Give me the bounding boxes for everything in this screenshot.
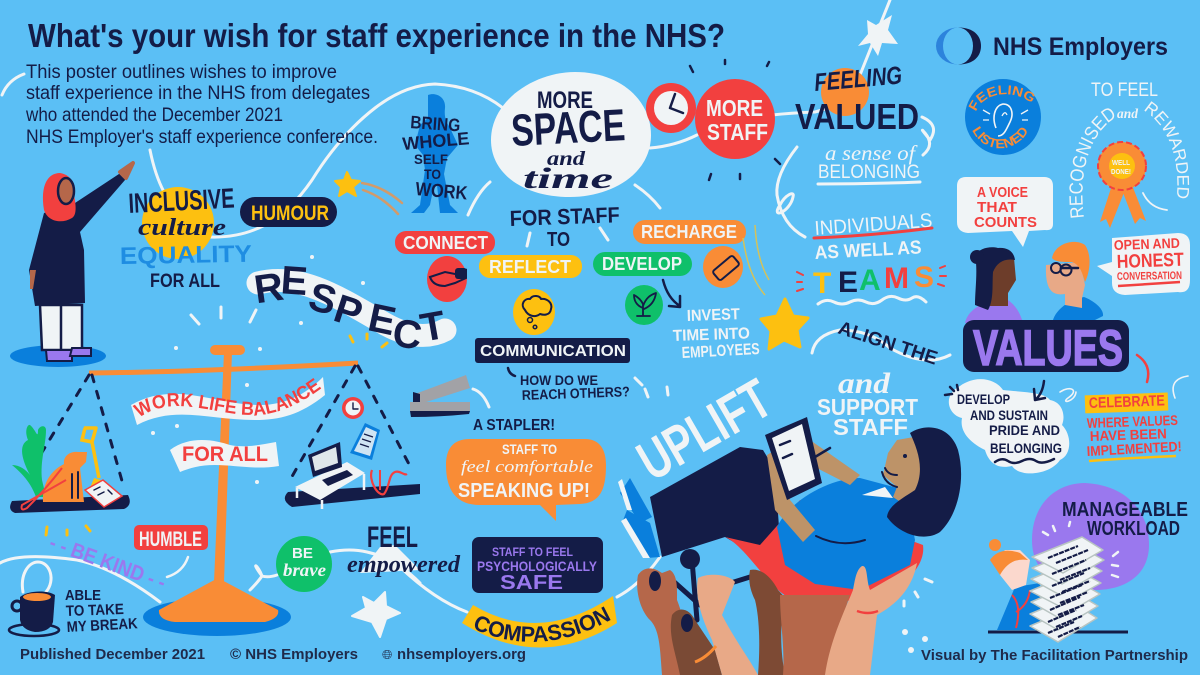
more space and time bubble: time xyxy=(523,162,613,195)
bring whole self to work silhouette: BRING xyxy=(410,112,461,135)
humble tag xyxy=(134,525,208,577)
recognised and rewarded: TO FEEL xyxy=(1091,80,1158,101)
communication box: REACH OTHERS? xyxy=(522,383,630,403)
recognised and rewarded: and xyxy=(1117,107,1139,122)
connecting white swirl lines xyxy=(0,0,950,612)
respect banner: T xyxy=(417,303,449,351)
more space and time bubble: and xyxy=(547,148,586,170)
icon: shooting star xyxy=(335,172,402,214)
invest time into employees: EMPLOYEES xyxy=(681,341,760,362)
individuals as well as teams: INDIVIDUALS xyxy=(814,210,933,240)
a voice that counts speech bubble: COUNTS xyxy=(974,214,1037,231)
respect banner: S xyxy=(304,275,341,324)
decorative sparkles xyxy=(151,255,928,653)
develop and sustain cloud: PRIDE AND xyxy=(989,422,1060,438)
be kind: - - BE KIND - - xyxy=(46,531,169,594)
recognised and rewarded: REWARDED xyxy=(1144,101,1190,198)
feeling listened badge: FEELING xyxy=(968,85,1034,111)
footer credits: © NHS Employers xyxy=(230,646,358,663)
a sense of belonging: a sense of xyxy=(825,141,918,165)
intro text block xyxy=(25,62,378,148)
psychologically safe box: SAFE xyxy=(500,572,563,594)
able to take my break: MY BREAK xyxy=(66,615,138,636)
communication box: COMMUNICATION xyxy=(480,343,626,360)
develop pill and sprout icon: DEVELOP xyxy=(602,254,682,274)
for all banner xyxy=(170,440,279,472)
respect banner: E xyxy=(279,258,309,304)
celebrate label: CELEBRATE xyxy=(1089,392,1165,412)
celebrate label xyxy=(1060,355,1188,461)
compassion banner: COMPASSION xyxy=(474,606,610,642)
bring whole self to work silhouette: SELF xyxy=(414,151,448,167)
more staff circle: STAFF xyxy=(707,119,768,145)
a stapler label: A STAPLER! xyxy=(473,417,555,434)
feeling valued xyxy=(795,61,919,137)
inclusive culture equality for all: INCLUSIVE xyxy=(128,182,235,219)
left scale pan with dog, plant, spade and book xyxy=(10,425,130,513)
arrow from values to cloud xyxy=(1034,381,1045,400)
icon: white star xyxy=(858,15,898,56)
humour pill xyxy=(240,197,337,227)
inclusive culture equality for all: EQUALITY xyxy=(120,241,252,270)
celebrate label: HAVE BEEN xyxy=(1090,425,1167,444)
arrow to invest time xyxy=(663,280,680,307)
speaking up speech bubble xyxy=(446,439,606,521)
more staff circle xyxy=(690,60,780,180)
individuals as well as teams: E xyxy=(838,266,858,299)
psychologically safe box: PSYCHOLOGICALLY xyxy=(477,558,598,574)
respect banner xyxy=(252,258,449,359)
speaking up speech bubble: SPEAKING UP! xyxy=(458,480,590,502)
more space and time bubble xyxy=(491,72,651,197)
a voice that counts speech bubble xyxy=(957,177,1053,247)
open and honest conversation speech bubble xyxy=(1097,233,1190,295)
feel empowered xyxy=(347,521,461,578)
more space and time bubble: SPACE xyxy=(510,99,626,156)
develop and sustain cloud: BELONGING xyxy=(990,440,1062,456)
individuals as well as teams: A xyxy=(859,264,881,297)
intro text block: This poster outlines wishes to improve xyxy=(26,62,337,83)
individuals as well as teams xyxy=(797,210,946,304)
individuals as well as teams: AS WELL AS xyxy=(814,237,922,264)
align the: ALIGN THE xyxy=(835,318,940,370)
recognised and rewarded xyxy=(1069,80,1190,228)
respect banner: E xyxy=(364,296,400,344)
icon: yellow star xyxy=(761,299,808,349)
intro text block: who attended the December 2021 xyxy=(25,105,283,126)
NHS Employers logo xyxy=(936,28,1168,64)
a voice that counts speech bubble: THAT xyxy=(977,199,1017,216)
develop and sustain cloud: AND SUSTAIN xyxy=(970,407,1048,423)
open and honest conversation speech bubble: HONEST xyxy=(1116,250,1184,273)
individuals as well as teams: S xyxy=(914,261,934,294)
icon: red clock xyxy=(646,83,696,133)
develop and sustain cloud: DEVELOP xyxy=(957,391,1010,407)
bring whole self to work silhouette: WHOLE xyxy=(402,128,470,154)
a sense of belonging: BELONGING xyxy=(818,162,920,183)
respect banner: P xyxy=(329,287,368,337)
work life balance banner: WORK LIFE BALANCE xyxy=(132,378,322,416)
and support staff xyxy=(817,367,918,440)
invest time into employees: INVEST xyxy=(687,306,740,325)
a voice that counts speech bubble: A VOICE xyxy=(977,184,1028,201)
be brave circle: BE xyxy=(292,545,313,562)
intro text block: staff experience in the NHS from delegates xyxy=(26,83,370,104)
individuals as well as teams: M xyxy=(884,262,909,295)
footer credits xyxy=(20,646,1188,664)
feel empowered: FEEL xyxy=(367,521,418,554)
celebrate label: IMPLEMENTED! xyxy=(1086,438,1182,459)
more staff circle: MORE xyxy=(706,95,763,121)
connect pill and handshake icon: CONNECT xyxy=(403,233,488,253)
balance scale xyxy=(33,345,412,636)
uplift heading: UPLIFT xyxy=(626,366,782,492)
celebrate label: WHERE VALUES xyxy=(1087,412,1178,431)
for staff to xyxy=(509,202,620,251)
figure: supporting hands and wheelchair xyxy=(637,549,932,675)
footer credits: 🌐︎ xyxy=(382,647,392,662)
feel empowered: empowered xyxy=(347,552,461,578)
figure: woman with dark hair xyxy=(965,247,1023,323)
figure pointing woman in hijab xyxy=(10,163,133,367)
footer credits: Published December 2021 xyxy=(20,646,205,663)
connect pill and handshake icon xyxy=(395,231,495,302)
and support staff: STAFF xyxy=(833,414,908,440)
for staff to: FOR STAFF xyxy=(509,202,620,231)
icon: coffee cup xyxy=(9,562,59,636)
inclusive culture equality for all: FOR ALL xyxy=(150,271,220,292)
feeling listened badge: LISTENED xyxy=(972,126,1027,148)
values box: VALUES xyxy=(973,320,1123,376)
recognised and rewarded: DONE! xyxy=(1111,169,1131,176)
able to take my break: TO TAKE xyxy=(66,601,124,620)
inclusive culture equality for all: culture xyxy=(138,215,226,241)
psychologically safe box xyxy=(472,537,603,594)
intro text block: NHS Employer's staff experience conference. xyxy=(26,127,378,148)
figure: man with glasses xyxy=(1046,242,1103,320)
a sense of belonging xyxy=(818,141,920,184)
feeling valued: VALUED xyxy=(795,96,919,137)
for all banner: FOR ALL xyxy=(182,443,268,466)
manageable workload xyxy=(988,483,1188,642)
feeling listened badge xyxy=(965,79,1041,155)
invest time into employees: TIME INTO xyxy=(673,325,750,345)
invest time into employees xyxy=(673,306,760,362)
develop pill and sprout icon xyxy=(593,252,692,325)
develop and sustain cloud xyxy=(945,379,1069,473)
respect banner: R xyxy=(252,265,286,312)
and support staff: and xyxy=(838,367,891,400)
NHS Employers logo: NHS Employers xyxy=(993,33,1168,61)
respect banner: C xyxy=(390,311,425,359)
icon: stapler xyxy=(410,375,470,417)
recharge pill and battery icon xyxy=(633,220,769,295)
figure: person being lifted with clipboard xyxy=(618,417,961,612)
individuals as well as teams: T xyxy=(813,267,831,300)
yellow ticks above scales xyxy=(46,334,387,535)
right scale pan with clock, clipboard, computer and stethoscope xyxy=(285,397,420,509)
be brave circle xyxy=(276,536,332,592)
bring whole self to work silhouette xyxy=(402,94,470,213)
speaking up speech bubble: STAFF TO xyxy=(502,441,557,457)
open and honest conversation speech bubble: OPEN AND xyxy=(1114,235,1180,253)
psychologically safe box: STAFF TO FEEL xyxy=(492,545,573,559)
communication box: HOW DO WE xyxy=(520,372,598,388)
inclusive culture equality for all xyxy=(120,182,252,292)
feeling valued: FEELING xyxy=(813,61,903,97)
footer credits: Visual by The Facilitation Partnership xyxy=(921,647,1188,664)
reflect pill and thought icon xyxy=(479,255,582,335)
bring whole self to work silhouette: WORK xyxy=(415,179,468,205)
speaking up speech bubble: feel comfortable xyxy=(461,457,594,476)
able to take my break: ABLE xyxy=(65,587,101,604)
humour pill: HUMOUR xyxy=(251,202,329,225)
and support staff: SUPPORT xyxy=(817,394,918,420)
bring whole self to work silhouette: TO xyxy=(424,166,441,182)
recharge pill and battery icon: RECHARGE xyxy=(641,222,737,242)
reflect pill and thought icon: REFLECT xyxy=(489,257,571,277)
footer credits: nhsemployers.org xyxy=(397,646,526,663)
for staff to: TO xyxy=(547,229,570,251)
be brave circle: brave xyxy=(283,560,326,580)
more space and time bubble: MORE xyxy=(537,87,593,114)
humble tag: HUMBLE xyxy=(139,528,202,551)
able to take my break xyxy=(65,587,138,636)
icon: large white star xyxy=(352,592,400,637)
title: What's your wish for staff experience in the NHS? xyxy=(28,17,725,54)
recognised and rewarded: RECOGNISED xyxy=(1069,108,1114,218)
communication box xyxy=(475,338,630,403)
recognised and rewarded: WELL xyxy=(1112,160,1131,167)
